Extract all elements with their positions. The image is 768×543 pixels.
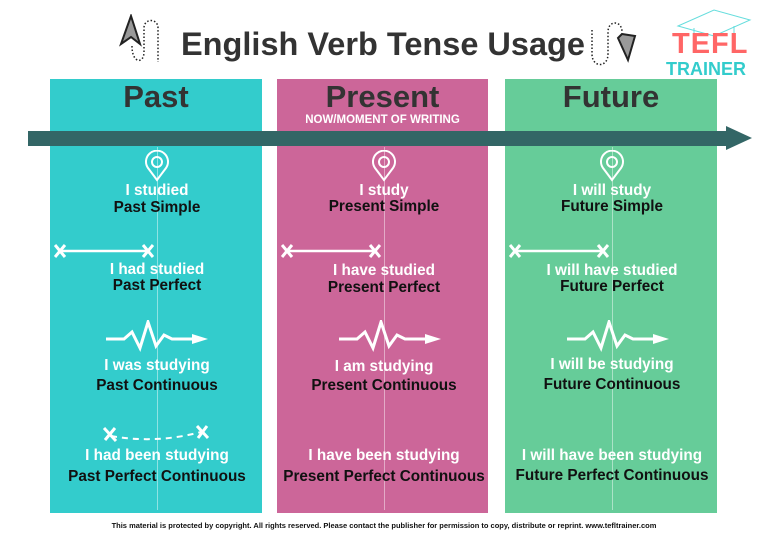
text: future: I will be studying — [550, 356, 674, 373]
icon: left plane — [119, 14, 159, 62]
heading: Present: Present — [326, 79, 439, 114]
text: past — [68, 182, 246, 485]
panel: future — [505, 79, 717, 513]
panel: past — [50, 79, 262, 513]
text: future: I will have been studying — [522, 447, 702, 464]
text: future: Future Continuous — [544, 376, 680, 393]
text: past: Past Perfect — [113, 277, 201, 294]
text: present: I study — [359, 182, 409, 199]
text: future: Future Perfect Continuous — [516, 467, 708, 484]
text: present: I am studying — [335, 358, 433, 375]
icons: zigzags — [106, 320, 208, 352]
footer: This material is protected by copyright. All rights reserved. Please contact the publisher for permission to copy, distribute or reprint. www.tefltrainer.com — [112, 521, 656, 530]
text: present: I have studied — [333, 262, 435, 279]
text: past: I had studied — [110, 261, 204, 278]
text: past: Past Simple — [114, 199, 200, 216]
icon: dashed perfect continuous — [103, 425, 209, 442]
text: past: Past Perfect Continuous — [68, 468, 246, 485]
text: past: I studied — [126, 182, 188, 199]
heading: Past: Past — [123, 79, 189, 114]
text: present: Present Simple — [329, 198, 439, 215]
icon: right plane — [591, 22, 636, 66]
heading: Future: Future — [563, 79, 659, 114]
subheading: now: NOW/MOMENT OF WRITING — [305, 114, 460, 126]
text: future: Future Simple — [561, 198, 663, 215]
text: present: Present Perfect — [328, 279, 440, 296]
text: past: I was studying — [104, 357, 210, 374]
text: future: I will have studied — [547, 262, 677, 279]
text: future: Future Perfect — [560, 278, 664, 295]
text: past: I had been studying — [85, 447, 229, 464]
text: present: Present Continuous — [311, 377, 457, 394]
text: future: I will study — [573, 182, 651, 199]
text: present: Present Perfect Continuous — [283, 468, 485, 485]
icons: perfect lines — [54, 244, 154, 258]
text: present — [283, 182, 485, 485]
logo: TRAINER — [666, 59, 746, 79]
panel: present — [277, 79, 488, 513]
icons: pins — [145, 150, 169, 182]
text: future — [516, 182, 708, 484]
timeline arrow — [28, 126, 752, 150]
text: past: Past Continuous — [96, 377, 218, 394]
logo — [666, 10, 752, 79]
text: present: I have been studying — [308, 447, 460, 464]
logo: TEFL — [672, 28, 748, 60]
title: English Verb Tense Usage — [181, 26, 585, 62]
